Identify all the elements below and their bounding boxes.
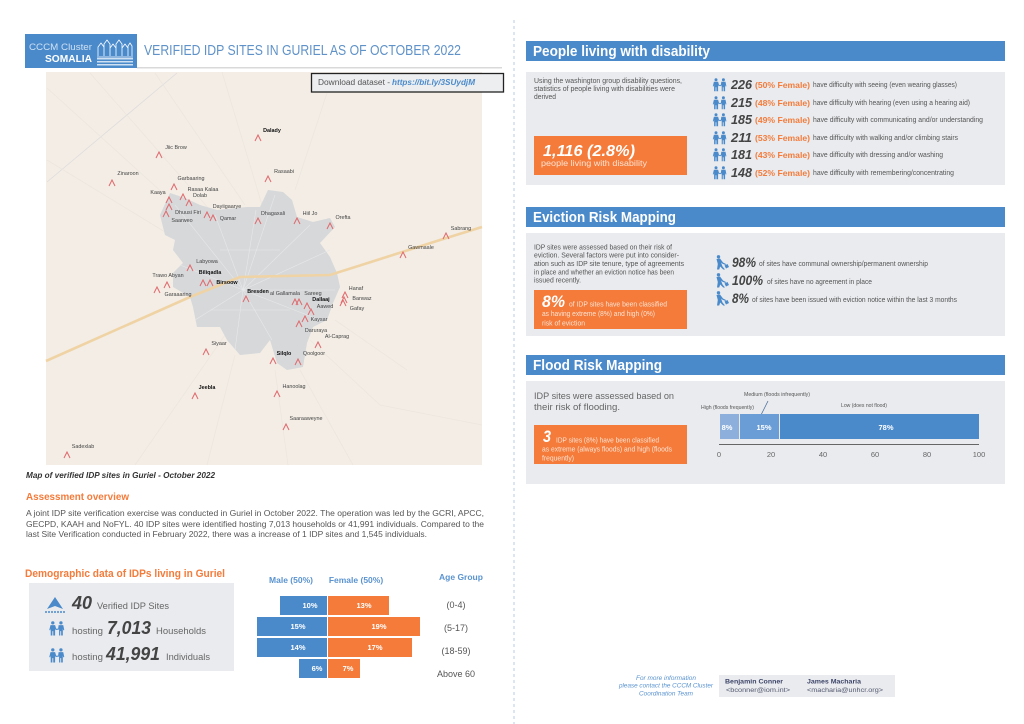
panel: demographic key figures: 41,991 [105, 644, 160, 664]
stacked bar chart: flood risk: 80 [923, 450, 931, 459]
callout: 3 sites: 3 [543, 427, 551, 446]
site labels: Saarweo [171, 218, 193, 224]
callout: 3 sites: as extreme (always floods) and high (floods [542, 446, 672, 454]
panel: disability: Using the washington group disability questions, [534, 78, 682, 85]
disability statistics rows: have difficulty with seeing (even wearing glasses) [813, 82, 957, 89]
site labels: Biliqadla [199, 270, 222, 276]
eviction statistics rows: of sites have no agreement in place [767, 279, 872, 286]
panel: people living with disability heading: People living with disability [533, 44, 710, 60]
population pyramid: 17% [367, 643, 383, 652]
site labels: Sareeg [304, 291, 322, 297]
disability statistics rows: 215 [730, 95, 753, 110]
site labels: Gawmaale [408, 245, 434, 251]
callout: 3 sites [534, 425, 687, 464]
disability statistics rows: (49% Female) [755, 115, 810, 125]
site labels: Labyowa [196, 259, 218, 265]
panel: flood: IDP sites were assessed based on [534, 391, 674, 402]
footer: contact note: For more information [636, 676, 697, 682]
assessment overview heading: Assessment overview [26, 491, 130, 503]
disability statistics rows: 211 [730, 130, 752, 145]
header: cluster logo: CCCM Cluster [29, 42, 92, 53]
stacked bar chart: flood risk: 100 [973, 450, 985, 459]
download dataset box: https://bit.ly/3SUydjM [392, 78, 475, 87]
site labels: Zinaroon [117, 171, 139, 177]
site labels: Trawo Abyan [152, 273, 184, 279]
panel: flood [526, 381, 1005, 484]
stacked bar chart: flood risk: 0 [717, 450, 721, 459]
map of verified IDP sites [46, 72, 482, 465]
site labels: Dolab [193, 193, 207, 199]
disability statistics rows: (52% Female) [755, 168, 810, 178]
panel: disability [526, 72, 1005, 185]
panel: flood: their risk of flooding. [534, 402, 620, 413]
footer: contacts: <bconner@iom.int> [726, 687, 790, 694]
disability statistics rows: 185 [731, 112, 753, 127]
panel: eviction [526, 233, 1005, 336]
site labels: Orefta [336, 215, 350, 221]
eviction statistics rows: 100% [732, 273, 763, 288]
panel: eviction: issued recently. [534, 278, 581, 284]
map caption: Map of verified IDP sites in Guriel - October 2022 [26, 470, 215, 480]
population pyramid: (18-59) [441, 646, 471, 656]
site labels: Dhuusi Firi [175, 210, 201, 216]
population pyramid: 13% [356, 601, 372, 610]
site labels: al Gallamala [270, 291, 300, 297]
disability statistics rows: (48% Female) [755, 98, 810, 108]
site labels: Bresden [247, 289, 269, 295]
panel: eviction: IDP sites were assessed based on their risk of [534, 244, 672, 252]
site labels: Saaraaweyne [290, 416, 322, 422]
callout: 8% eviction risk: 8% [542, 292, 565, 311]
panel: eviction: ation such as IDP site tenure, type of agreements [534, 261, 684, 268]
site labels: Jeebla [199, 385, 216, 391]
eviction statistics rows [716, 255, 957, 306]
site labels: Kaaya [150, 190, 166, 196]
disability statistics rows: (50% Female) [755, 80, 810, 90]
site labels: Gafay [350, 306, 364, 312]
population pyramid: Age Group [439, 572, 483, 582]
panel: demographic key figures [29, 583, 234, 671]
eviction statistics rows: of sites have been issued with eviction notice within the last 3 months [752, 297, 957, 304]
site labels: Kaysar [311, 317, 328, 323]
disability statistics rows: (53% Female) [755, 133, 810, 143]
stacked bar chart: flood risk [701, 392, 985, 459]
panel: disability: statistics of people living with disabilities were [534, 86, 675, 93]
district area [160, 190, 340, 370]
disability statistics rows: have difficulty with dressing and/or washing [813, 152, 943, 159]
stacked bar chart: flood risk: 78% [878, 423, 894, 432]
stacked bar chart: flood risk: Medium (floods infrequently) [744, 392, 810, 398]
assessment overview text: GECPD, KAAH and NoFYL. 40 IDP sites were identified hosting 7,013 households or 41,991 individuals. Compared to the [26, 519, 484, 529]
icon: people households [49, 621, 64, 636]
population pyramid: (5-17) [444, 623, 468, 633]
site labels [72, 128, 471, 450]
panel: demographic key figures: 7,013 [107, 618, 151, 638]
site labels: Sadexlab [72, 444, 94, 450]
site labels: Dalady [263, 128, 281, 134]
footer: contact note [618, 676, 714, 698]
population pyramid: 10% [302, 601, 318, 610]
site labels: Al-Caprag [325, 334, 349, 340]
population pyramid: Above 60 [437, 669, 475, 679]
site labels: Qoolgoor [303, 351, 325, 357]
callout: 1,116 people: people living with disability [541, 158, 648, 168]
population pyramid: 19% [371, 622, 387, 631]
callout: 1,116 people: 1,116 (2.8%) [543, 143, 635, 160]
panel: demographic key figures: Individuals [166, 652, 210, 663]
assessment overview text [26, 508, 484, 539]
disability statistics rows: have difficulty with remembering/concentrating [813, 170, 954, 177]
site labels: Hanoolag [282, 384, 306, 390]
site markers [64, 135, 449, 458]
stacked bar chart: flood risk: 15% [756, 423, 772, 432]
disability statistics rows: (43% Female) [755, 150, 810, 160]
panel: demographic key figures: 40 [71, 593, 92, 613]
footer: contacts: Benjamin Conner [725, 678, 784, 686]
population pyramid [257, 572, 483, 679]
callout: 8% eviction risk: of IDP sites have been classified [569, 302, 667, 308]
icon: people individuals [49, 648, 64, 663]
eviction statistics rows: 98% [732, 255, 756, 270]
site labels: Sabrang [451, 226, 471, 232]
site labels: Banwaz [352, 296, 372, 302]
disability statistics rows: 226 [730, 77, 753, 92]
assessment overview text: last Site Verification conducted in February 2022, there was a increase of 1 IDP sites and 1,545 individuals. [26, 529, 427, 539]
population pyramid: Female (50%) [329, 575, 383, 585]
population pyramid: 15% [290, 622, 306, 631]
site labels: Dayiigaarye [213, 204, 241, 210]
footer: contact note: Coordination Team [639, 692, 693, 698]
callout: 3 sites: IDP sites (8%) have been classified [556, 438, 659, 444]
site labels: Dhagaxali [261, 211, 285, 217]
stacked bar chart: flood risk: Low (does not flood) [841, 403, 887, 409]
demographic heading: Demographic data of IDPs living in Guriel [25, 568, 225, 580]
stacked bar chart: flood risk: 40 [819, 450, 827, 459]
download dataset box: Download dataset - [318, 78, 390, 87]
site labels: Jiic Brow [165, 145, 187, 151]
main road [46, 227, 482, 361]
callout: 8% eviction risk: as having extreme (8%) and high (0%) [542, 311, 655, 318]
site labels: Rasaabi [274, 169, 294, 175]
disability statistics rows: have difficulty with walking and/or climbing stairs [813, 135, 958, 142]
site labels: Aawed [317, 304, 333, 310]
site labels: Hiil Jo [303, 211, 317, 217]
stacked bar chart: flood risk: 8% [722, 423, 733, 432]
eviction statistics rows: of sites have communal ownership/permanent ownership [759, 261, 928, 268]
footer: contacts [719, 675, 895, 697]
panel: demographic key figures: Verified IDP Sites [97, 601, 169, 612]
disability statistics rows [713, 77, 983, 180]
panel: demographic key figures: hosting [72, 626, 103, 637]
panel: eviction: eviction. Several factors were put into consider- [534, 252, 680, 260]
panel: people living with disability heading [526, 41, 1005, 61]
site labels: Birsoow [216, 280, 238, 286]
population pyramid: (0-4) [446, 600, 466, 610]
panel: demographic key figures: hosting [72, 652, 103, 663]
footer: contact note: please contact the CCCM Cluster [618, 684, 714, 690]
assessment overview text: A joint IDP site verification exercise was conducted in Guriel in October 2022. The operation was led by the GCRI, APCC, [26, 508, 484, 518]
site labels: Siyaar [211, 341, 227, 347]
site labels: Qamar [220, 216, 236, 222]
disability statistics rows: 148 [731, 165, 753, 180]
site labels: Rasaa Kalaa [188, 187, 218, 193]
panel: eviction risk mapping heading [526, 207, 1005, 227]
site labels: Hanaf [349, 286, 364, 292]
population pyramid: 7% [343, 664, 354, 673]
population pyramid: 6% [312, 664, 323, 673]
site labels: Garaaaring [165, 292, 191, 298]
site labels: Silqlo [277, 351, 292, 357]
stacked bar chart: flood risk: High (floods frequently) [701, 405, 754, 411]
callout: 3 sites: frequently) [542, 456, 574, 462]
footer: contacts: James Macharia [807, 678, 861, 686]
eviction statistics rows: 8% [732, 291, 749, 306]
site labels: Dallaaj [312, 297, 330, 303]
stacked bar chart: flood risk: 60 [871, 450, 879, 459]
panel: disability: derived [534, 94, 556, 101]
panel: demographic key figures: Households [156, 626, 206, 637]
footer: contacts: <macharia@unhcr.org> [807, 687, 883, 694]
download dataset box [312, 74, 504, 92]
stacked bar chart: flood risk: 20 [767, 450, 775, 459]
disability statistics rows: have difficulty with communicating and/or understanding [813, 117, 983, 124]
panel: eviction risk mapping heading: Eviction Risk Mapping [533, 210, 676, 226]
panel: flood risk mapping heading: Flood Risk Mapping [533, 358, 662, 374]
panel: flood risk mapping heading [526, 355, 1005, 375]
population pyramid: Male (50%) [269, 575, 313, 585]
panel: eviction: in place and whether an eviction notice has been [534, 270, 674, 276]
site labels: Garbaaring [178, 176, 204, 182]
callout: 8% eviction risk: risk of eviction [542, 320, 585, 328]
population pyramid: 14% [290, 643, 306, 652]
header: cluster logo: SOMALIA [45, 53, 92, 65]
header: cluster logo [25, 34, 137, 68]
disability statistics rows: 181 [731, 147, 752, 162]
title: VERIFIED IDP SITES IN GURIEL AS OF OCTOBER 2022 [144, 43, 461, 59]
disability statistics rows: have difficulty with hearing (even using a hearing aid) [813, 100, 970, 107]
icon: tent [45, 597, 65, 612]
site labels: Daruraya [305, 328, 327, 334]
callout: 8% eviction risk [534, 290, 687, 329]
callout: 1,116 people [534, 136, 687, 175]
